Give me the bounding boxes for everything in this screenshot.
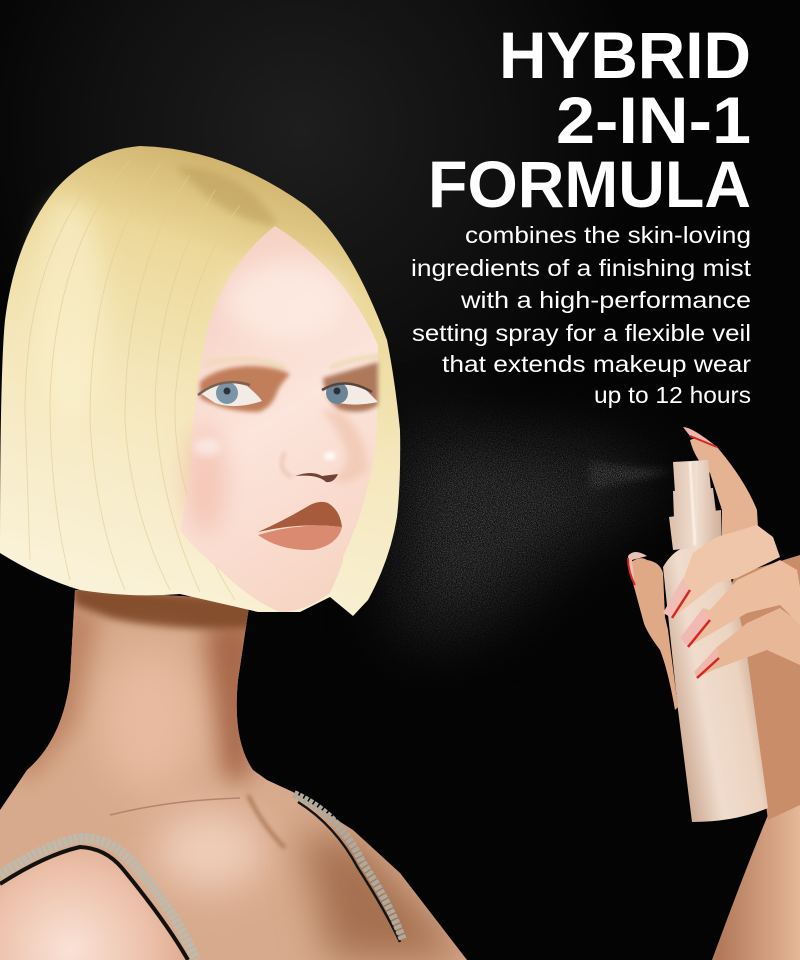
body text: up to 12 hours — [594, 382, 751, 408]
nose — [282, 410, 368, 482]
body text — [411, 222, 752, 408]
left eye — [198, 382, 262, 406]
left strap — [0, 838, 196, 960]
index nail — [683, 427, 717, 447]
hair — [0, 146, 400, 616]
face — [180, 226, 380, 612]
forearm — [712, 795, 800, 960]
bottle — [663, 460, 768, 822]
right eye shadow — [323, 362, 378, 412]
heading — [428, 18, 751, 221]
thumb — [630, 558, 678, 710]
neck and shoulders — [0, 585, 470, 960]
collarbone — [110, 798, 240, 815]
thumb nail — [628, 552, 647, 585]
heading: 2-IN-1 — [556, 83, 751, 157]
upper arm — [0, 848, 186, 960]
body text: ingredients of a finishing mist — [411, 255, 752, 281]
forehead sheen — [225, 260, 345, 340]
lips — [258, 502, 342, 550]
hair strands — [25, 160, 240, 600]
skin shading — [10, 585, 470, 960]
body text: with a high-performance — [460, 287, 751, 313]
bottle body — [663, 540, 768, 822]
root shadow — [175, 165, 278, 226]
hand and spray bottle — [628, 427, 800, 960]
neck tendon — [248, 795, 285, 848]
finger 1 — [672, 525, 780, 618]
finger 2 — [688, 560, 800, 647]
right strap — [294, 794, 403, 942]
cheek highlight — [194, 438, 220, 456]
pump top — [673, 460, 711, 493]
pump highlight — [690, 462, 695, 545]
heading: HYBRID — [499, 18, 751, 92]
pump middle — [673, 488, 716, 519]
finger 2 nail — [680, 608, 710, 647]
heading: FORMULA — [428, 147, 751, 221]
right eye — [322, 382, 378, 405]
hair shine — [35, 200, 105, 420]
index finger — [690, 439, 758, 540]
finger 3 nail — [694, 647, 719, 678]
mist spray — [364, 394, 674, 668]
finger 1 nail — [663, 578, 690, 618]
body text: combines the skin-loving — [465, 222, 751, 248]
right eyebrow — [330, 356, 380, 368]
left eyebrow — [205, 359, 285, 368]
pump base — [669, 510, 722, 550]
body text: that extends makeup wear — [442, 351, 751, 377]
cheek blush — [183, 425, 227, 535]
palm — [715, 555, 800, 820]
left eye shadow — [200, 366, 290, 412]
skin base — [0, 590, 467, 960]
body text: setting spray for a flexible veil — [412, 320, 751, 346]
finger 3 — [697, 608, 800, 678]
